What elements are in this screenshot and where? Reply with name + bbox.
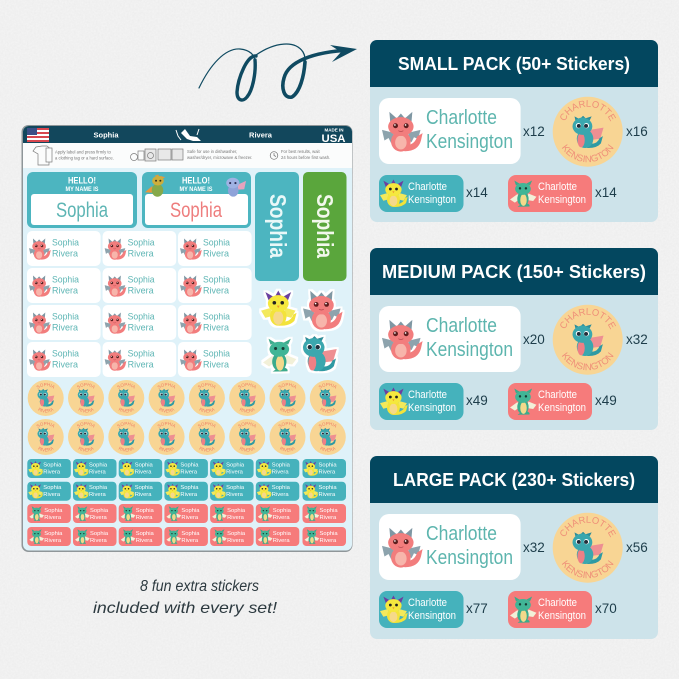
sheet header bar: Sophia xyxy=(93,130,119,140)
teal label sample xyxy=(379,383,464,420)
small coral labels, row 2: Sophia xyxy=(90,531,109,537)
small coral labels, row 2: Sophia xyxy=(44,531,63,537)
name labels grid: Rivera xyxy=(52,248,79,260)
name labels grid: Sophia xyxy=(203,348,231,360)
round labels, row 2: SOPHIA xyxy=(198,422,216,428)
sticker: yellow dragon xyxy=(261,290,297,326)
name labels grid: Sophia xyxy=(52,312,80,322)
round labels, row 1: RIVERA xyxy=(240,408,255,412)
name label sample: Charlotte xyxy=(426,315,497,337)
round labels, row 1: SOPHIA xyxy=(158,382,176,389)
small teal labels, row 1: Sophia xyxy=(318,462,337,468)
panel: large pack: x56 xyxy=(626,540,648,555)
round labels, row 1: SOPHIA xyxy=(77,382,94,389)
vertical label: green: Sophia xyxy=(312,194,338,258)
made in USA badge xyxy=(322,128,346,145)
round labels, row 2: SOPHIA xyxy=(278,422,296,428)
small teal labels, row 2: Sophia xyxy=(318,485,337,491)
small teal labels, row 1 xyxy=(27,459,346,478)
name labels grid: Rivera xyxy=(128,286,154,296)
name label sample xyxy=(379,306,521,372)
icon: clock xyxy=(270,152,278,159)
small teal labels, row 1: Rivera xyxy=(180,470,198,476)
name labels grid: Rivera xyxy=(128,248,154,260)
round labels, row 1: SOPHIA xyxy=(318,382,336,389)
name labels grid: Rivera xyxy=(203,322,230,334)
panel: medium pack: x32 xyxy=(626,332,648,347)
round label sample xyxy=(552,512,623,583)
small teal labels, row 2: Sophia xyxy=(226,485,245,491)
hello name badge: teal: Sophia xyxy=(56,199,108,222)
small coral labels, row 1: Sophia xyxy=(227,508,246,514)
hello name badge: teal: MY NAME IS xyxy=(66,186,99,193)
small coral labels, row 1 xyxy=(27,504,346,523)
teal label sample xyxy=(379,591,464,628)
small teal labels, row 1: Rivera xyxy=(43,470,61,476)
round labels, row 1: SOPHIA xyxy=(117,382,135,389)
round labels, row 2: SOPHIA xyxy=(158,422,176,428)
arrow: hand-drawn loop pointing to the packs xyxy=(199,44,357,100)
panel: medium pack: x49 xyxy=(466,393,488,408)
round label sample: CHARLOTTE xyxy=(560,100,616,122)
name label sample: Kensington xyxy=(426,339,513,361)
small coral labels, row 1: Sophia xyxy=(181,508,200,514)
small teal labels, row 1: Rivera xyxy=(226,470,244,476)
name labels grid: Rivera xyxy=(203,286,230,296)
name labels grid: Rivera xyxy=(52,286,79,296)
panel: small pack xyxy=(370,40,658,222)
panel: large pack: LARGE PACK (230+ Stickers) xyxy=(393,470,635,490)
coral label sample: Kensington xyxy=(538,610,586,622)
teal label sample: Kensington xyxy=(408,610,456,622)
panel: small pack: x14 xyxy=(466,185,488,200)
small teal labels, row 1: Sophia xyxy=(43,462,62,468)
name labels grid: Sophia xyxy=(52,238,80,248)
round labels, row 2: RIVERA xyxy=(280,446,296,452)
panel: medium pack: x20 xyxy=(523,332,545,347)
round labels, row 1: RIVERA xyxy=(199,408,215,412)
small teal labels, row 2: Rivera xyxy=(226,492,244,498)
made in USA badge: MADE IN xyxy=(324,128,344,132)
name labels grid: Sophia xyxy=(203,274,231,286)
small coral labels, row 2: Rivera xyxy=(90,538,108,544)
small coral labels, row 1: Sophia xyxy=(273,508,292,514)
small teal labels, row 1: Sophia xyxy=(180,462,199,468)
panel: medium pack: x49 xyxy=(595,393,617,408)
panel: medium pack xyxy=(370,248,658,430)
name label sample xyxy=(379,98,521,164)
vertical label: green xyxy=(303,172,346,281)
small teal labels, row 2: Sophia xyxy=(180,485,199,491)
name labels grid: Sophia xyxy=(52,274,80,286)
small teal labels, row 2: Rivera xyxy=(89,492,107,498)
small coral labels, row 1: Rivera xyxy=(320,515,337,521)
small teal labels, row 2: Sophia xyxy=(43,485,62,491)
icon: dinosaur logo xyxy=(176,129,201,141)
hello name badge: dragons: HELLO! xyxy=(182,176,210,186)
name labels grid xyxy=(27,231,252,377)
icon: shirt and tag xyxy=(33,146,52,165)
round label sample: CHARLOTTE xyxy=(560,516,616,538)
name label sample xyxy=(379,514,521,580)
round labels, row 2: SOPHIA xyxy=(36,422,54,428)
round label sample xyxy=(552,96,623,167)
small teal labels, row 1: Rivera xyxy=(318,470,336,476)
teal label sample: Charlotte xyxy=(408,597,447,609)
hello name badge: dragons: Sophia xyxy=(170,199,222,222)
name label sample: Charlotte xyxy=(426,107,497,129)
panel: small pack: SMALL PACK (50+ Stickers) xyxy=(398,54,630,74)
hello name badge: dragons xyxy=(142,172,251,228)
coral label sample xyxy=(508,383,592,420)
round labels, row 1: RIVERA xyxy=(159,408,174,412)
round labels, row 1: SOPHIA xyxy=(36,382,54,389)
round labels, row 1 xyxy=(28,380,346,416)
hello name badge: teal xyxy=(27,172,137,228)
round labels, row 2: RIVERA xyxy=(199,446,215,452)
instructions strip: 24 hours before first wash. xyxy=(281,155,330,160)
small teal labels, row 2: Rivera xyxy=(318,492,336,498)
coral label sample: Charlotte xyxy=(538,181,577,193)
coral label sample xyxy=(508,591,592,628)
panel: large pack xyxy=(370,456,658,639)
vertical label: teal xyxy=(255,172,299,281)
round labels, row 2: RIVERA xyxy=(159,446,174,452)
name labels grid: Sophia xyxy=(128,312,155,322)
small coral labels, row 2: Sophia xyxy=(273,531,292,537)
panel: small pack: x12 xyxy=(523,124,545,139)
small coral labels, row 2: Sophia xyxy=(227,531,246,537)
sheet header bar: Rivera xyxy=(249,130,273,140)
round labels, row 1: SOPHIA xyxy=(278,382,296,389)
small teal labels, row 2: Rivera xyxy=(180,492,198,498)
hello name badge: teal: HELLO! xyxy=(68,176,96,186)
round labels, row 1: RIVERA xyxy=(38,408,54,412)
small coral labels, row 1: Rivera xyxy=(181,515,199,521)
extra dragon stickers xyxy=(261,290,343,372)
sticker: teal dragon xyxy=(303,336,337,371)
coral label sample: Charlotte xyxy=(538,389,577,401)
teal label sample: Kensington xyxy=(408,194,456,206)
small teal labels, row 1: Sophia xyxy=(89,462,108,468)
small coral labels, row 2: Rivera xyxy=(44,538,62,544)
caption: included with every set! xyxy=(93,600,278,617)
coral label sample: Kensington xyxy=(538,194,586,206)
round label sample xyxy=(552,304,623,375)
small coral labels, row 2: Rivera xyxy=(273,538,290,544)
instructions strip: Safe for use in dishwasher, xyxy=(187,149,237,154)
small coral labels, row 1: Sophia xyxy=(136,508,155,514)
small coral labels, row 1: Rivera xyxy=(273,515,290,521)
small coral labels, row 2: Sophia xyxy=(136,531,155,537)
name labels grid: Sophia xyxy=(203,238,231,248)
vertical label: teal: Sophia xyxy=(265,194,291,258)
round labels, row 2: SOPHIA xyxy=(238,422,256,428)
made in USA badge: USA xyxy=(322,133,346,145)
small teal labels, row 1: Rivera xyxy=(135,470,152,476)
small coral labels, row 1: Sophia xyxy=(44,508,63,514)
caption: 8 fun extra stickers xyxy=(140,578,259,595)
icon: US flag xyxy=(27,128,49,142)
small coral labels, row 1: Sophia xyxy=(90,508,109,514)
round label sample: KENSINGTON xyxy=(562,352,614,370)
round labels, row 2: RIVERA xyxy=(320,446,336,452)
name label sample: Kensington xyxy=(426,547,513,569)
small coral labels, row 2: Rivera xyxy=(227,538,245,544)
sticker: red dragon xyxy=(303,291,343,330)
name labels grid: Sophia xyxy=(128,238,155,248)
name labels grid: Rivera xyxy=(128,360,154,370)
round labels, row 1: RIVERA xyxy=(118,408,134,412)
small coral labels, row 2 xyxy=(27,527,346,546)
name labels grid: Rivera xyxy=(128,322,154,334)
round labels, row 1: SOPHIA xyxy=(238,382,256,389)
small coral labels, row 1: Rivera xyxy=(136,515,153,521)
small teal labels, row 2 xyxy=(27,482,346,501)
small coral labels, row 1: Sophia xyxy=(320,508,338,514)
teal label sample: Charlotte xyxy=(408,181,447,193)
panel: medium pack: MEDIUM PACK (150+ Stickers) xyxy=(382,262,646,282)
name labels grid: Rivera xyxy=(203,360,230,370)
small coral labels, row 2: Rivera xyxy=(181,538,199,544)
caption xyxy=(93,578,278,617)
round labels, row 2: SOPHIA xyxy=(318,422,336,428)
small coral labels, row 1: Rivera xyxy=(90,515,108,521)
panel: small pack: x16 xyxy=(626,124,648,139)
round labels, row 1: SOPHIA xyxy=(198,383,216,389)
instructions strip: washer/dryer, microwave & freezer. xyxy=(187,155,252,160)
small coral labels, row 2: Sophia xyxy=(181,531,200,537)
small teal labels, row 1: Sophia xyxy=(272,462,291,468)
small coral labels, row 1: Rivera xyxy=(44,515,62,521)
small coral labels, row 2: Sophia xyxy=(320,531,338,537)
sticker: green dragon xyxy=(263,339,296,372)
round label sample: KENSINGTON xyxy=(562,560,614,578)
name labels grid: Sophia xyxy=(203,312,231,322)
instructions strip: For best results, wait xyxy=(281,149,320,154)
round labels, row 1: RIVERA xyxy=(280,408,296,412)
round label sample: KENSINGTON xyxy=(562,144,614,162)
instructions strip: a clothing tag or a hard surface. xyxy=(55,156,114,160)
teal label sample xyxy=(379,175,464,212)
round labels, row 2: RIVERA xyxy=(118,446,134,452)
panel: large pack: x77 xyxy=(466,601,488,616)
sheet header bar xyxy=(23,126,352,145)
name labels grid: Sophia xyxy=(52,348,80,360)
round labels, row 2: SOPHIA xyxy=(117,422,135,428)
hello name badge: dragons: MY NAME IS xyxy=(180,186,213,193)
small teal labels, row 2: Sophia xyxy=(89,485,108,491)
name labels grid: Rivera xyxy=(203,248,230,260)
panel: small pack: x14 xyxy=(595,185,617,200)
panel: sticker sheet xyxy=(22,125,352,552)
name labels grid: Rivera xyxy=(52,322,79,334)
small teal labels, row 1: Rivera xyxy=(272,470,289,476)
small teal labels, row 1: Sophia xyxy=(226,462,245,468)
coral label sample: Kensington xyxy=(538,402,586,414)
small teal labels, row 2: Sophia xyxy=(272,485,291,491)
coral label sample xyxy=(508,175,592,212)
teal label sample: Kensington xyxy=(408,402,456,414)
name label sample: Charlotte xyxy=(426,523,497,545)
icons: appliances xyxy=(130,149,183,161)
small teal labels, row 2: Sophia xyxy=(135,485,154,491)
round labels, row 2: RIVERA xyxy=(240,446,255,452)
name label sample: Kensington xyxy=(426,131,513,153)
small teal labels, row 2: Rivera xyxy=(43,492,61,498)
name labels grid: Rivera xyxy=(52,360,79,370)
round labels, row 1: RIVERA xyxy=(78,408,94,412)
round labels, row 2: RIVERA xyxy=(78,446,94,452)
panel: large pack: x32 xyxy=(523,540,545,555)
panel: large pack: x70 xyxy=(595,601,617,616)
name labels grid: Sophia xyxy=(128,348,155,360)
round labels, row 2: SOPHIA xyxy=(77,422,94,428)
small teal labels, row 1: Sophia xyxy=(135,462,154,468)
instructions strip: Apply label and press firmly to xyxy=(55,150,112,154)
teal label sample: Charlotte xyxy=(408,389,447,401)
small teal labels, row 1: Rivera xyxy=(89,470,107,476)
small teal labels, row 2: Rivera xyxy=(135,492,152,498)
small coral labels, row 2: Rivera xyxy=(136,538,153,544)
name labels grid: Sophia xyxy=(128,274,155,286)
small teal labels, row 2: Rivera xyxy=(272,492,289,498)
round labels, row 2: RIVERA xyxy=(38,446,54,452)
instructions strip xyxy=(23,143,352,168)
coral label sample: Charlotte xyxy=(538,597,577,609)
round labels, row 2 xyxy=(28,419,346,455)
round labels, row 1: RIVERA xyxy=(320,408,336,412)
small coral labels, row 1: Rivera xyxy=(227,515,245,521)
round label sample: CHARLOTTE xyxy=(560,308,616,330)
small coral labels, row 2: Rivera xyxy=(320,538,337,544)
